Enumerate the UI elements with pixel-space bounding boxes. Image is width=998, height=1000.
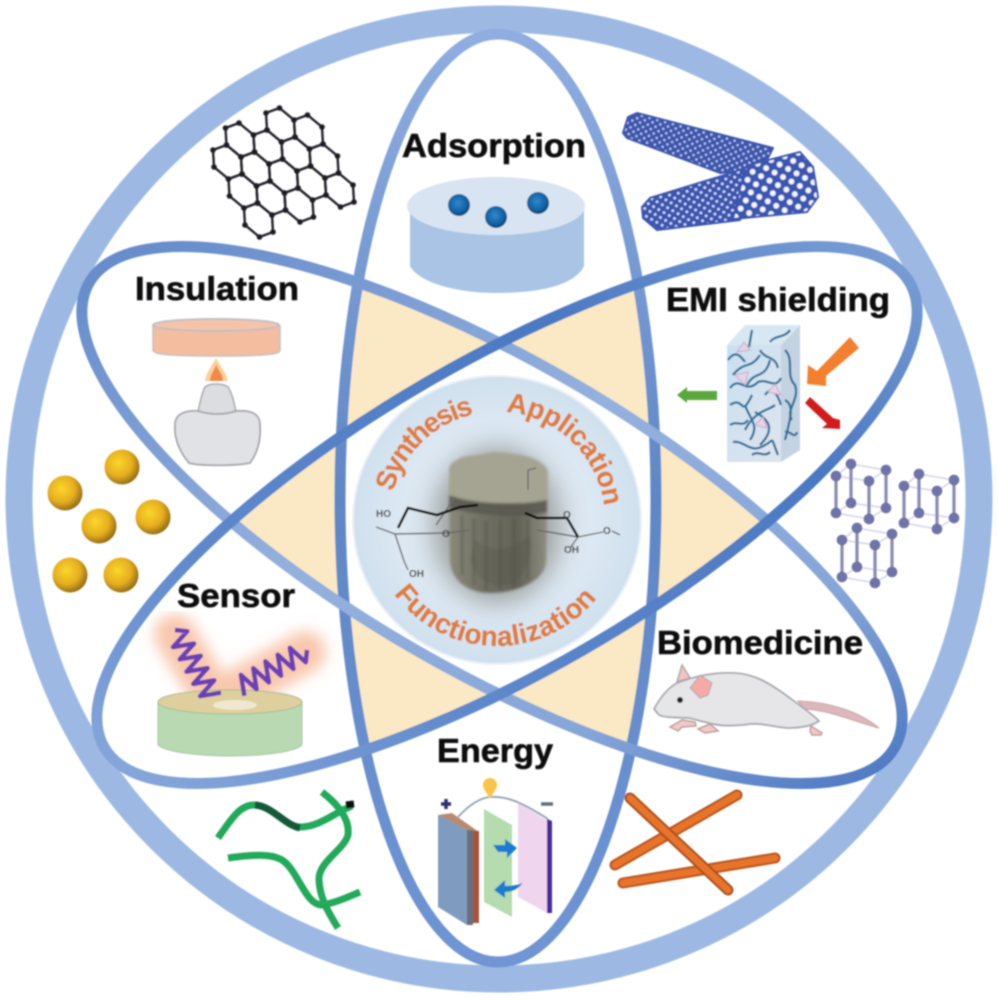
icon: adsorption disc xyxy=(407,177,585,293)
molecule labels xyxy=(376,509,611,580)
orbit ellipse upper-left to lower-right xyxy=(12,148,972,882)
vertical orbit ellipse xyxy=(340,34,656,962)
icon: mouse xyxy=(654,665,879,735)
central badge: Application xyxy=(506,393,620,506)
icon: carbon nanotubes xyxy=(623,113,818,230)
icon: lattice cubes xyxy=(831,459,959,588)
Functionalization arc text xyxy=(394,594,600,646)
molecule labels: O xyxy=(442,529,450,540)
icon: sensor disc with springs xyxy=(158,630,307,756)
molecule labels: OH xyxy=(564,545,579,556)
Synthesis arc text xyxy=(393,412,488,492)
icon: graphene sheet xyxy=(210,105,357,240)
icon: orange nanorods xyxy=(615,795,775,890)
molecule labels: O xyxy=(563,510,571,521)
Application arc text xyxy=(506,412,605,516)
central badge xyxy=(352,375,642,665)
icon: gold nanoparticles xyxy=(48,450,170,592)
arrow: reflected red xyxy=(805,397,840,429)
icon: burner under insulating disc xyxy=(153,319,280,465)
central badge: Functionalization xyxy=(394,582,596,648)
icon: green polymer chains xyxy=(218,792,360,928)
molecule structure xyxy=(376,468,620,580)
arrow: incoming orange xyxy=(807,337,859,386)
photo shadow halo xyxy=(433,447,561,603)
molecule labels: OH xyxy=(409,569,424,580)
orbit ellipse upper-right to lower-left xyxy=(27,148,987,882)
heading: Biomedicine: Biomedicine xyxy=(657,624,863,661)
yellow star regions xyxy=(240,290,760,744)
arrow: transmitted green xyxy=(677,387,717,403)
molecule labels: HO xyxy=(376,509,391,520)
molecule labels: O xyxy=(603,526,611,537)
heading: Sensor: Sensor xyxy=(177,577,295,614)
icon: battery cell xyxy=(438,778,553,925)
heading: Insulation: Insulation xyxy=(135,270,299,307)
aerogel cylinder xyxy=(449,452,548,593)
central badge: Synthesis xyxy=(376,399,473,491)
icon: EMI shielding block xyxy=(727,325,800,462)
badge disc xyxy=(353,376,641,664)
heading: EMI shielding: EMI shielding xyxy=(666,281,890,318)
heading: Adsorption: Adsorption xyxy=(402,127,586,164)
heading: Energy: Energy xyxy=(437,732,554,769)
